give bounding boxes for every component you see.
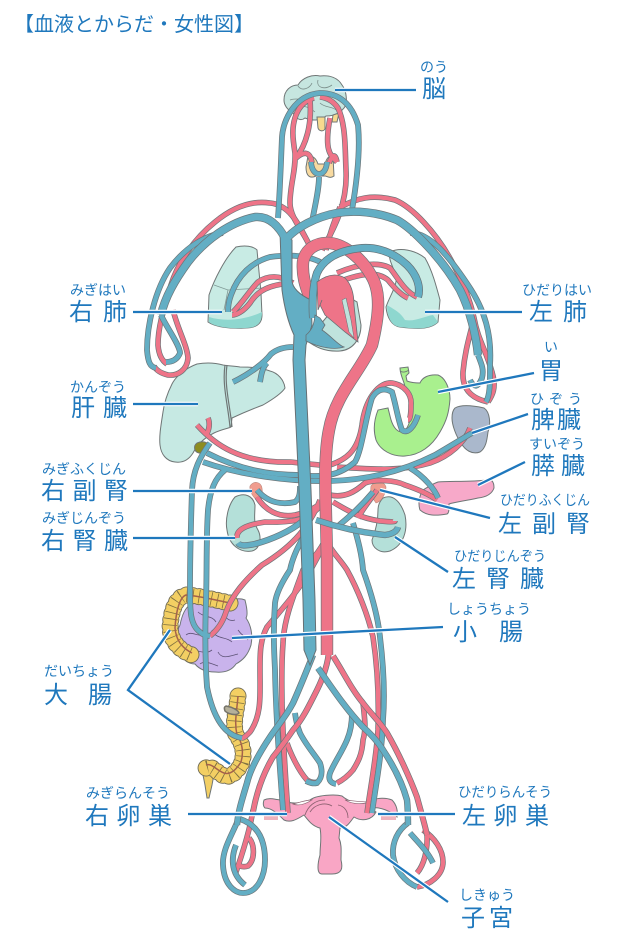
organ: pancreas xyxy=(419,480,494,515)
organ: stomach xyxy=(374,367,450,456)
label: right kidney: みぎじんぞう xyxy=(42,510,126,526)
label: spleen: ひぞう xyxy=(530,391,582,407)
label: left kidney: 左腎臓 xyxy=(452,566,544,593)
label: right kidney: 右腎臓 xyxy=(41,528,128,555)
label: brain: のう xyxy=(420,59,448,75)
vessels: thin blue veins xyxy=(147,93,490,893)
label: left ovary: 左卵巣 xyxy=(462,803,549,830)
organ: uterus and fallopian tubes xyxy=(263,795,397,874)
label: left kidney: ひだりじんぞう xyxy=(454,548,546,564)
label: small intestine: しょうちょう xyxy=(447,601,531,617)
label: left adrenal: 左副腎 xyxy=(498,511,590,538)
organ: right lung xyxy=(208,246,262,328)
organ: spleen xyxy=(452,406,490,453)
label: left lung xyxy=(522,282,592,326)
vessel: aorta xyxy=(303,243,378,655)
label: pancreas xyxy=(529,436,585,480)
label: brain xyxy=(420,59,448,103)
label: right adrenal: 右副腎 xyxy=(41,478,128,505)
label: large intestine: 大腸 xyxy=(44,682,112,709)
label: brain: 脳 xyxy=(422,76,446,103)
label: right lung: みぎはい xyxy=(70,282,126,298)
organ: small intestine xyxy=(177,599,252,672)
label: right lung: 右肺 xyxy=(69,299,127,326)
label: pancreas: 膵臓 xyxy=(531,453,585,480)
organ: adrenal glands xyxy=(250,482,386,503)
organ: brain xyxy=(284,75,346,131)
label: right adrenal xyxy=(41,461,128,505)
label: left lung: ひだりはい xyxy=(522,282,592,298)
label: liver: かんぞう xyxy=(70,379,126,395)
label: uterus: しきゅう xyxy=(459,887,515,903)
vessels: iliac arteries xyxy=(253,650,427,835)
organ: left kidney xyxy=(372,497,406,552)
label: left kidney xyxy=(452,548,546,593)
label: large intestine: だいちょう xyxy=(44,663,114,679)
label: right lung xyxy=(69,282,127,326)
vessels: large arm veins xyxy=(161,212,478,665)
label: uterus: 子宮 xyxy=(461,905,513,932)
label: right ovary: みぎらんそう xyxy=(86,785,170,801)
label: left adrenal: ひだりふくじん xyxy=(500,492,590,508)
leader lines xyxy=(128,90,534,902)
label: stomach xyxy=(539,339,563,385)
label: left adrenal xyxy=(498,492,590,538)
vessels: iliac veins xyxy=(237,520,408,825)
label: pancreas: すいぞう xyxy=(529,436,585,452)
label: liver xyxy=(70,379,127,422)
label: large intestine xyxy=(44,663,114,709)
title: 【血液とからだ・女性図】 xyxy=(14,13,254,36)
organ: thyroid xyxy=(306,156,334,177)
label: spleen: 脾臓 xyxy=(531,407,581,434)
label: right ovary xyxy=(85,785,172,830)
vessel: vena cava xyxy=(280,232,316,665)
organ: liver xyxy=(160,363,285,462)
label: stomach: 胃 xyxy=(539,358,563,385)
label: right ovary: 右卵巣 xyxy=(85,803,172,830)
label: left ovary: ひだりらんそう xyxy=(458,784,552,800)
label: small intestine: 小腸 xyxy=(453,619,523,646)
organ: gallbladder xyxy=(195,442,209,453)
organ: right kidney xyxy=(226,495,260,551)
label: stomach: い xyxy=(544,339,558,355)
label: uterus xyxy=(459,887,515,932)
vessel: pulmonary trunk arc xyxy=(313,248,419,318)
label: left ovary xyxy=(458,784,552,830)
label: small intestine xyxy=(447,601,531,646)
organ: heart xyxy=(306,275,361,351)
label: right kidney xyxy=(41,510,128,555)
organ: large intestine, lower xyxy=(202,696,243,798)
organ: large intestine, upper xyxy=(170,595,230,655)
vessels: thin red arteries xyxy=(154,97,494,887)
label: left lung: 左肺 xyxy=(529,299,587,326)
label: spleen xyxy=(530,391,582,434)
organ: left lung xyxy=(386,250,440,328)
label: right adrenal: みぎふくじん xyxy=(42,461,126,477)
label: liver: 肝臓 xyxy=(71,395,127,422)
